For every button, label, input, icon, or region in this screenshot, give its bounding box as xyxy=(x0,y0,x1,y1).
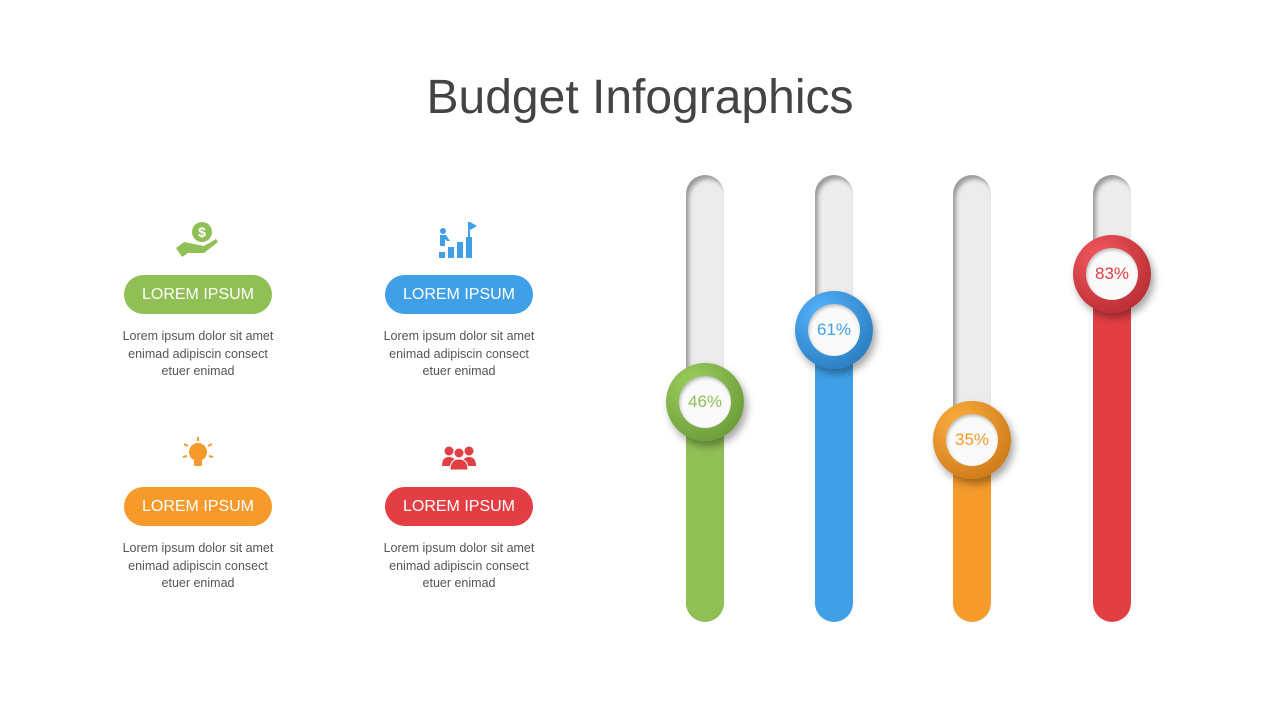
panel: item 2 xyxy=(384,222,534,378)
text: Lorem ipsum dolor sit amet xyxy=(384,541,534,555)
icon: team xyxy=(442,446,476,470)
knob: 83%: 83% xyxy=(1095,264,1129,283)
title: Budget Infographics xyxy=(427,71,853,124)
text: enimad adipiscin consect xyxy=(128,346,268,360)
icon: bulb xyxy=(182,437,214,466)
text xyxy=(123,541,274,590)
knob: 46% xyxy=(666,363,744,441)
text: Lorem ipsum dolor sit amet xyxy=(123,541,273,555)
panel: item 4 xyxy=(384,446,534,590)
text xyxy=(384,329,534,378)
pill: red: LOREM IPSUM xyxy=(403,498,515,515)
text: Lorem ipsum dolor sit amet xyxy=(123,329,273,343)
bar: 61% xyxy=(793,175,881,622)
knob: 83% xyxy=(1073,235,1151,313)
text: Lorem ipsum dolor sit amet xyxy=(384,329,534,343)
pill: green xyxy=(124,275,272,314)
pill: green: LOREM IPSUM xyxy=(142,286,254,303)
text: etuer enimad xyxy=(162,576,234,590)
panel: item 3 xyxy=(123,437,274,590)
pill: orange xyxy=(124,487,272,526)
text xyxy=(123,329,274,378)
panel: item 1 xyxy=(123,222,274,378)
text: enimad adipiscin consect xyxy=(389,346,529,360)
bar: 83% xyxy=(1071,175,1159,622)
text: enimad adipiscin consect xyxy=(128,558,268,572)
bar: 35% xyxy=(931,175,1019,622)
chart: slider bars xyxy=(664,175,1159,622)
bar: 46% xyxy=(664,175,752,622)
knob: 35%: 35% xyxy=(955,430,989,449)
pill: blue: LOREM IPSUM xyxy=(403,286,515,303)
text: enimad adipiscin consect xyxy=(389,558,529,572)
text: etuer enimad xyxy=(423,576,495,590)
pill: blue xyxy=(385,275,533,314)
knob: 61%: 61% xyxy=(817,320,851,339)
pill: orange: LOREM IPSUM xyxy=(142,498,254,515)
knob: 35% xyxy=(933,401,1011,479)
knob: 61% xyxy=(795,291,873,369)
text: etuer enimad xyxy=(162,364,234,378)
icon: money hand: $ xyxy=(198,224,206,240)
icon: money hand xyxy=(176,222,218,257)
text: etuer enimad xyxy=(423,364,495,378)
knob: 46%: 46% xyxy=(688,392,722,411)
text xyxy=(384,541,534,590)
icon: steps xyxy=(439,222,477,258)
pill: red xyxy=(385,487,533,526)
